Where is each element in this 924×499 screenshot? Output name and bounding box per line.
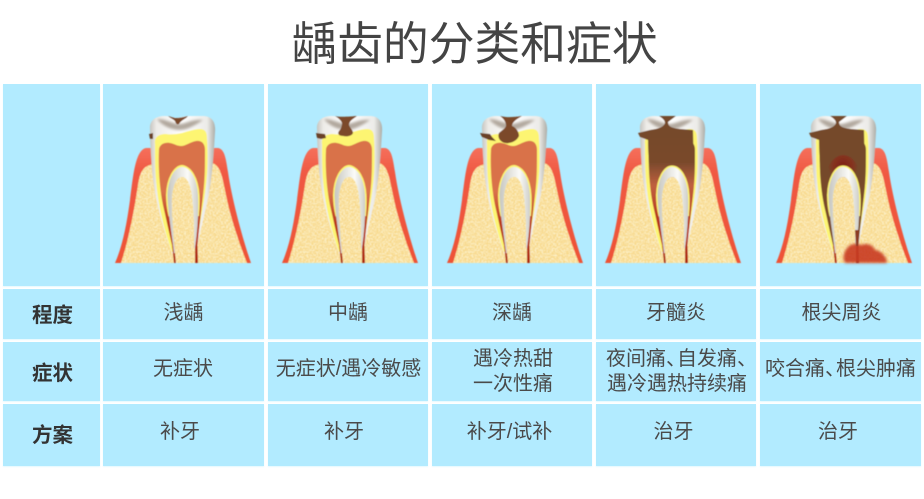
cell: 夜间痛、自发痛、遇冷遇热持续痛: 遇冷遇热持续痛 xyxy=(607,373,747,395)
cell: 补牙: 补牙 xyxy=(160,421,200,443)
cell: 浅龋 xyxy=(103,289,264,338)
tooth 1: shallow caries xyxy=(115,116,251,263)
cell: 补牙/试补: 补牙/试补 xyxy=(467,421,552,443)
cell: 无症状/遇冷敏感: 无症状/遇冷敏感 xyxy=(276,358,421,380)
cell: 遇冷热甜 一次性痛 xyxy=(432,342,592,401)
cell: 补牙 (2) xyxy=(268,404,428,466)
cell: 咬合痛、根尖肿痛 xyxy=(760,342,921,401)
cell: 遇冷热甜 一次性痛: 遇冷热甜 xyxy=(473,348,553,370)
panel: tooth image cell 4 xyxy=(596,84,756,286)
row header: 症状 xyxy=(3,342,100,401)
cell: 补牙 (2): 补牙 xyxy=(324,421,364,443)
cell: 深龋 xyxy=(432,289,592,338)
cell: 遇冷热甜 一次性痛: 一次性痛 xyxy=(473,373,553,395)
cell: 根尖周炎: 根尖周炎 xyxy=(802,302,882,324)
panel: tooth image cell 2 xyxy=(268,84,428,286)
cell: 中龋: 中龋 xyxy=(328,302,368,324)
row header: 程度: 程度 xyxy=(32,304,73,327)
cell: 咬合痛、根尖肿痛: 咬合痛、根尖肿痛 xyxy=(765,358,916,380)
cell: 夜间痛、自发痛、遇冷遇热持续痛 xyxy=(596,342,756,401)
cell: 治牙 (2) xyxy=(760,404,921,466)
panel: tooth image cell 3 xyxy=(432,84,592,286)
cell: 深龋: 深龋 xyxy=(492,302,532,324)
cell: 中龋 xyxy=(268,289,428,338)
cell: 牙髓炎 xyxy=(596,289,756,338)
cell: 无症状 xyxy=(103,342,264,401)
tooth 3: deep caries xyxy=(447,116,583,263)
tooth 5: periapical periodontitis xyxy=(776,116,912,263)
cell: 治牙 xyxy=(596,404,756,466)
row header: 方案 xyxy=(3,404,100,466)
cell: 无症状: 无症状 xyxy=(153,358,213,380)
cell: 夜间痛、自发痛、遇冷遇热持续痛: 夜间痛、自发痛、 xyxy=(606,348,757,370)
panel: empty header cell xyxy=(3,84,100,286)
cell: 补牙/试补 xyxy=(432,404,592,466)
cell: 无症状/遇冷敏感 xyxy=(268,342,428,401)
cell: 浅龋: 浅龋 xyxy=(164,302,204,324)
tooth 2: moderate caries xyxy=(282,116,418,263)
cell: 牙髓炎: 牙髓炎 xyxy=(646,302,706,324)
title: 龋齿的分类和症状 xyxy=(291,19,658,70)
cell: 治牙 (2): 治牙 xyxy=(818,421,858,443)
tooth 4: pulpitis xyxy=(605,116,741,263)
cell: 补牙 xyxy=(103,404,264,466)
row header: 程度 xyxy=(3,289,100,338)
row header: 症状: 症状 xyxy=(32,362,73,385)
abscess xyxy=(844,244,887,263)
panel: tooth image cell 1 xyxy=(103,84,264,286)
cell: 治牙: 治牙 xyxy=(654,421,694,443)
row header: 方案: 方案 xyxy=(32,424,73,447)
panel: tooth image cell 5 xyxy=(760,84,921,286)
cell: 根尖周炎 xyxy=(760,289,921,338)
